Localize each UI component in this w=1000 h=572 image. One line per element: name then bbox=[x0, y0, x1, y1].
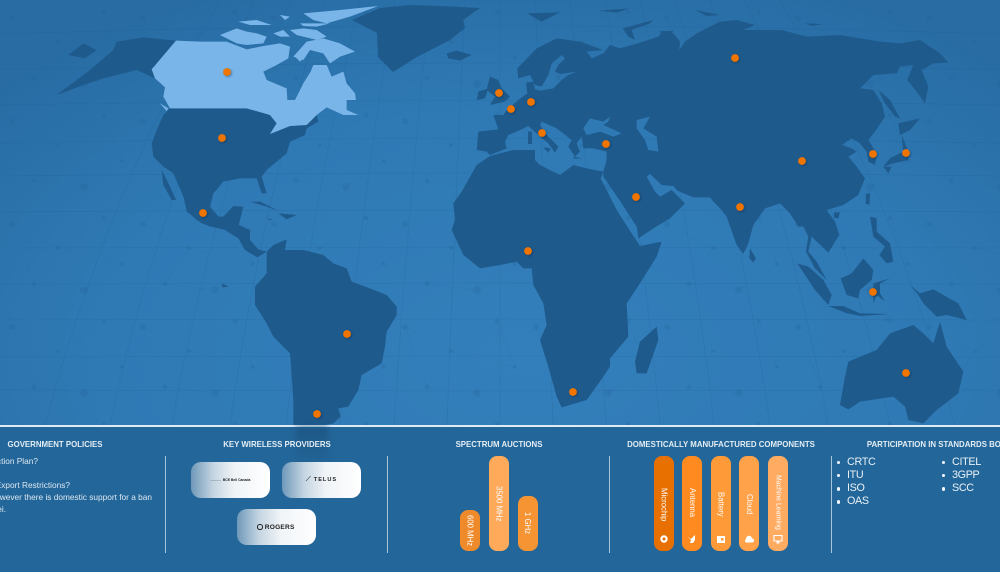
provider card: Bell: BCE Bell Canada bbox=[223, 478, 250, 482]
land: Central and South America bbox=[185, 200, 397, 427]
component bar: battery: Battery bbox=[716, 492, 726, 517]
spectrum bar: 3500 MHz: 3500 MHz bbox=[494, 486, 504, 521]
land: Alaska, Chukotka tip and US and Mexico bbox=[57, 37, 318, 230]
provider card: Rogers: ROGERS bbox=[265, 524, 295, 530]
location markers bbox=[199, 54, 910, 418]
land: Eurasia and Africa bbox=[447, 8, 948, 407]
list: standards bodies column one: ISO bbox=[847, 482, 865, 494]
spectrum bar: 1 GHz: 1 GHz bbox=[523, 512, 532, 535]
list: standards bodies column one bbox=[837, 456, 876, 507]
divider: column three bbox=[609, 456, 610, 553]
component bar: microchip bbox=[654, 456, 674, 551]
list: standards bodies column two: SCC bbox=[952, 482, 974, 494]
bottom information panel bbox=[0, 425, 1000, 572]
component bar: microchip: Microchip bbox=[660, 488, 668, 521]
component bar: battery bbox=[710, 456, 730, 551]
provider card: Telus bbox=[282, 462, 361, 498]
land: Japan, Sakhalin and Taiwan bbox=[866, 90, 920, 205]
land: Canada highlighted bbox=[152, 6, 378, 134]
land: Greenland bbox=[352, 5, 480, 72]
heading: domestically manufactured components: DOMESTICALLY MANUFACTURED COMPONENTS bbox=[627, 440, 815, 449]
list: standards bodies column two bbox=[942, 456, 981, 494]
spectrum bar: 3500 MHz bbox=[489, 456, 509, 551]
component bar: machine learning: Machine Learning bbox=[774, 475, 782, 530]
provider card: Telus: TELUS bbox=[314, 477, 337, 483]
provider card: Bell bbox=[191, 462, 270, 498]
component bar: antenna bbox=[682, 456, 702, 551]
spectrum bar: 600 MHz: 600 MHz bbox=[466, 515, 474, 546]
divider: column two bbox=[387, 456, 388, 553]
provider card: Bell: ——— bbox=[211, 478, 221, 482]
component bar: cloud: Cloud bbox=[745, 494, 754, 514]
component bar: antenna: Antenna bbox=[688, 488, 697, 517]
list: standards bodies column one: ITU bbox=[847, 469, 863, 481]
list: standards bodies column one: CRTC bbox=[847, 456, 875, 468]
blurred South America tip behind panel bbox=[296, 427, 328, 465]
heading: government policies: GOVERNMENT POLICIES bbox=[7, 440, 103, 449]
list: standards bodies column two: CITEL bbox=[952, 456, 981, 468]
heading: key wireless providers: KEY WIRELESS PROVIDERS bbox=[223, 440, 331, 449]
land: South-East Asia and Australia bbox=[749, 193, 967, 423]
divider: column one bbox=[165, 456, 166, 553]
heading: spectrum auctions: SPECTRUM AUCTIONS bbox=[456, 440, 542, 449]
component bar: cloud bbox=[739, 456, 759, 551]
divider: column four bbox=[831, 456, 832, 553]
spectrum bar: 1 GHz bbox=[518, 496, 538, 551]
provider card: Rogers bbox=[236, 509, 316, 545]
provider card: Telus: ⟋ bbox=[306, 476, 311, 483]
list: standards bodies column one: OAS bbox=[847, 495, 869, 507]
component bar: machine learning bbox=[768, 456, 788, 551]
list: standards bodies column two: 3GPP bbox=[952, 469, 979, 481]
spectrum bar: 600 MHz bbox=[460, 510, 480, 551]
